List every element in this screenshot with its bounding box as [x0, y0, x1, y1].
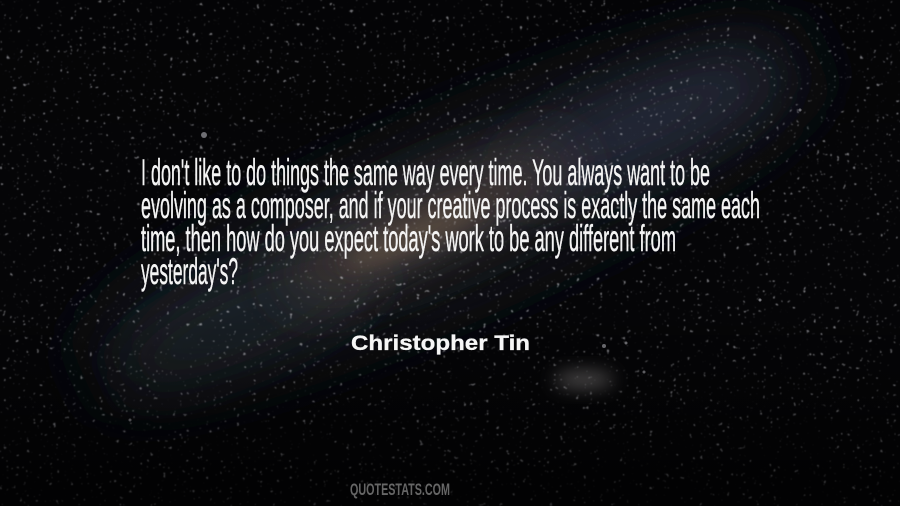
bright stars: [58, 108, 802, 422]
quote text: [141, 152, 760, 292]
watermark: QUOTESTATS.COM: [350, 480, 450, 499]
galaxy band: [58, 0, 842, 438]
author name: Christopher Tin: [351, 332, 530, 355]
small distant galaxy: [554, 372, 614, 388]
quote text: yesterday's?: [141, 251, 238, 292]
